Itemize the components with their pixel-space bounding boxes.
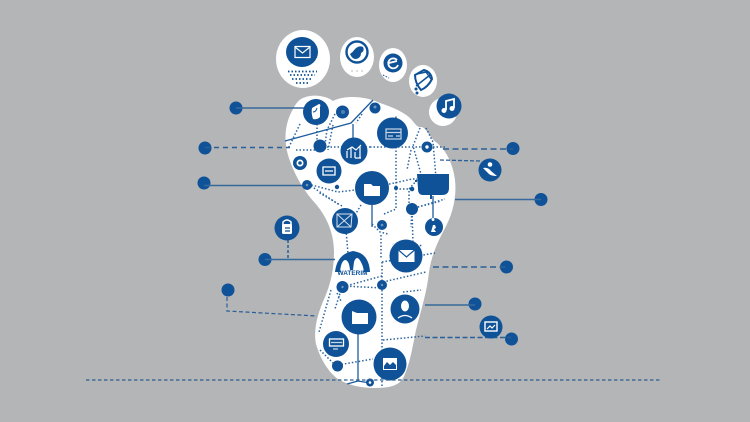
third toe	[379, 48, 407, 82]
connector: dashed left	[198, 142, 290, 154]
logo: arch emblem: WATERIM	[338, 271, 368, 277]
second toe	[340, 37, 374, 77]
connector: middle left	[198, 176, 308, 190]
foot node icons	[293, 99, 449, 386]
node: image cross	[332, 208, 358, 234]
node: document shape	[303, 99, 329, 125]
node: plain dot	[314, 140, 326, 152]
connector: bottom right dashed	[425, 332, 518, 346]
node: mail	[390, 240, 422, 272]
big toe	[276, 30, 330, 88]
node: junction right	[377, 280, 387, 290]
node: tiny square	[335, 185, 339, 189]
connector: top right dashed	[443, 142, 520, 155]
music note circle	[436, 94, 462, 118]
node: picture frame	[374, 348, 406, 380]
icon: photo badge	[480, 316, 502, 338]
node: cross dots	[394, 186, 414, 191]
node: bottom ring	[366, 378, 374, 386]
node: bar chart	[340, 138, 368, 164]
solid internal links	[285, 100, 433, 384]
toes	[276, 30, 462, 118]
right connectors	[425, 142, 548, 346]
connector: top left	[230, 102, 306, 114]
node: pin	[370, 102, 380, 114]
fourth toe	[409, 65, 437, 97]
foot silhouette	[285, 93, 462, 388]
icon: lock badge	[274, 216, 300, 258]
connector: right solid lower	[425, 298, 482, 310]
connector: lower left	[258, 253, 335, 266]
node: small junction	[302, 180, 312, 190]
node: right dot	[406, 203, 418, 215]
node: person pin	[425, 218, 443, 236]
node: camera ring	[293, 156, 307, 170]
logo: arch emblem	[335, 251, 370, 277]
icon: runner badge	[478, 158, 502, 182]
internal dotted network	[288, 114, 445, 386]
node: folder	[355, 171, 389, 205]
connector: right solid	[455, 193, 548, 206]
connector: runner dashed	[440, 160, 480, 161]
node: large folder	[342, 300, 376, 334]
node: small top	[336, 106, 349, 118]
ground line	[86, 379, 662, 381]
left connectors	[198, 102, 335, 316]
connector: right dashed	[433, 260, 513, 274]
node: plain bottom	[332, 360, 343, 372]
node: upper right pin	[422, 142, 432, 152]
node: small lower	[377, 220, 387, 230]
node: small ring left	[336, 281, 348, 293]
node: monitor	[316, 158, 342, 184]
node: rounded rectangle	[415, 174, 449, 199]
node: person	[390, 294, 420, 324]
connector: bottom left elbow	[222, 284, 317, 316]
node: card lower	[323, 331, 349, 357]
node: card	[377, 118, 408, 148]
